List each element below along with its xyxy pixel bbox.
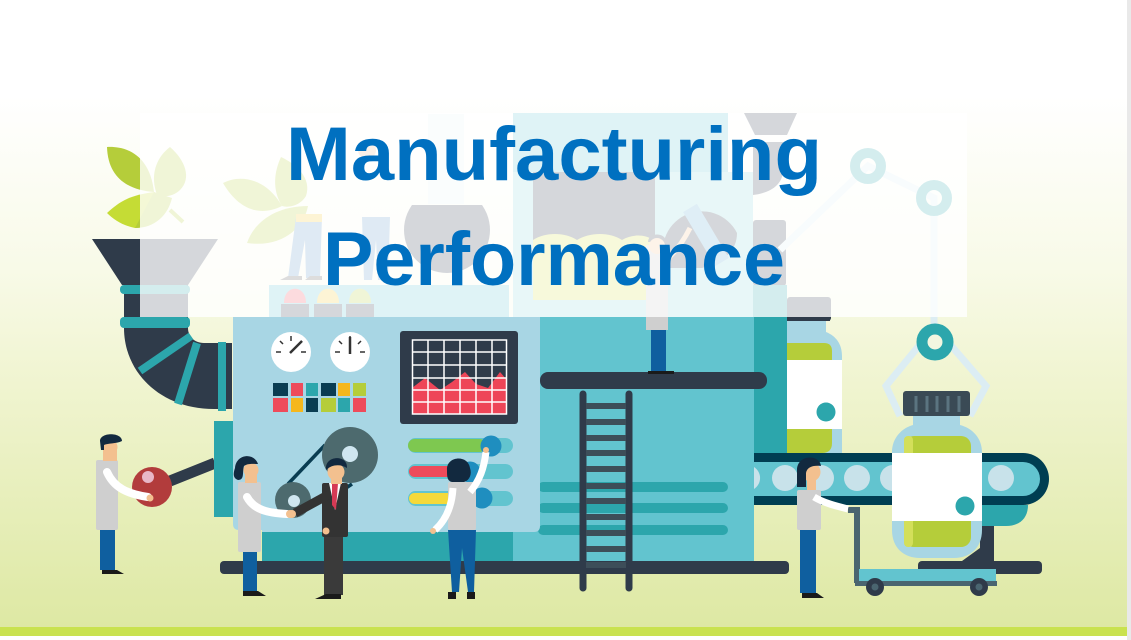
title: [286, 112, 822, 302]
translucent white title panel: [140, 113, 967, 317]
workers behind overlay: [280, 141, 390, 280]
control panel: [233, 317, 540, 532]
jar two: [892, 391, 982, 558]
robot gripper: [886, 329, 986, 416]
funnel and elbow pipe: [92, 239, 232, 411]
pulley gears: [275, 427, 378, 518]
jar one: [787, 317, 842, 453]
crank rod and teal side block: [170, 421, 233, 517]
ladder: [583, 394, 629, 588]
floor bar: [220, 561, 789, 574]
second plant behind overlay: [223, 157, 308, 244]
bottom lime bar: [0, 627, 1131, 636]
title: Performance: [323, 217, 785, 302]
upper control strip with lights: [269, 285, 509, 318]
man in suit shaking hands: [288, 458, 348, 599]
worker pushing cart: [797, 457, 848, 598]
colour swatches: [273, 383, 366, 412]
title: Manufacturing: [286, 112, 822, 197]
worker at sliders: [430, 447, 489, 599]
platform worker upper body behind overlay: [646, 228, 690, 320]
cart: [848, 510, 997, 596]
sliders: [408, 436, 513, 508]
platform: [540, 372, 767, 389]
right edge line: [1127, 0, 1131, 640]
flask behind overlay: [404, 205, 490, 273]
robot arm behind overlay: [780, 153, 947, 342]
woman shaking hands: [234, 456, 294, 596]
worker on platform lower body: [646, 317, 674, 374]
monitor with red area chart: [400, 331, 518, 424]
upper machine body behind overlay: [513, 113, 797, 318]
conveyor stand: [918, 505, 1042, 574]
conveyor belt: [754, 453, 1049, 505]
jar one cap behind overlay: [787, 297, 831, 321]
gauges: [271, 332, 370, 372]
lower machine body: [262, 317, 787, 561]
plant leaves at funnel: [107, 147, 186, 228]
worker with crank ball: [96, 434, 172, 574]
